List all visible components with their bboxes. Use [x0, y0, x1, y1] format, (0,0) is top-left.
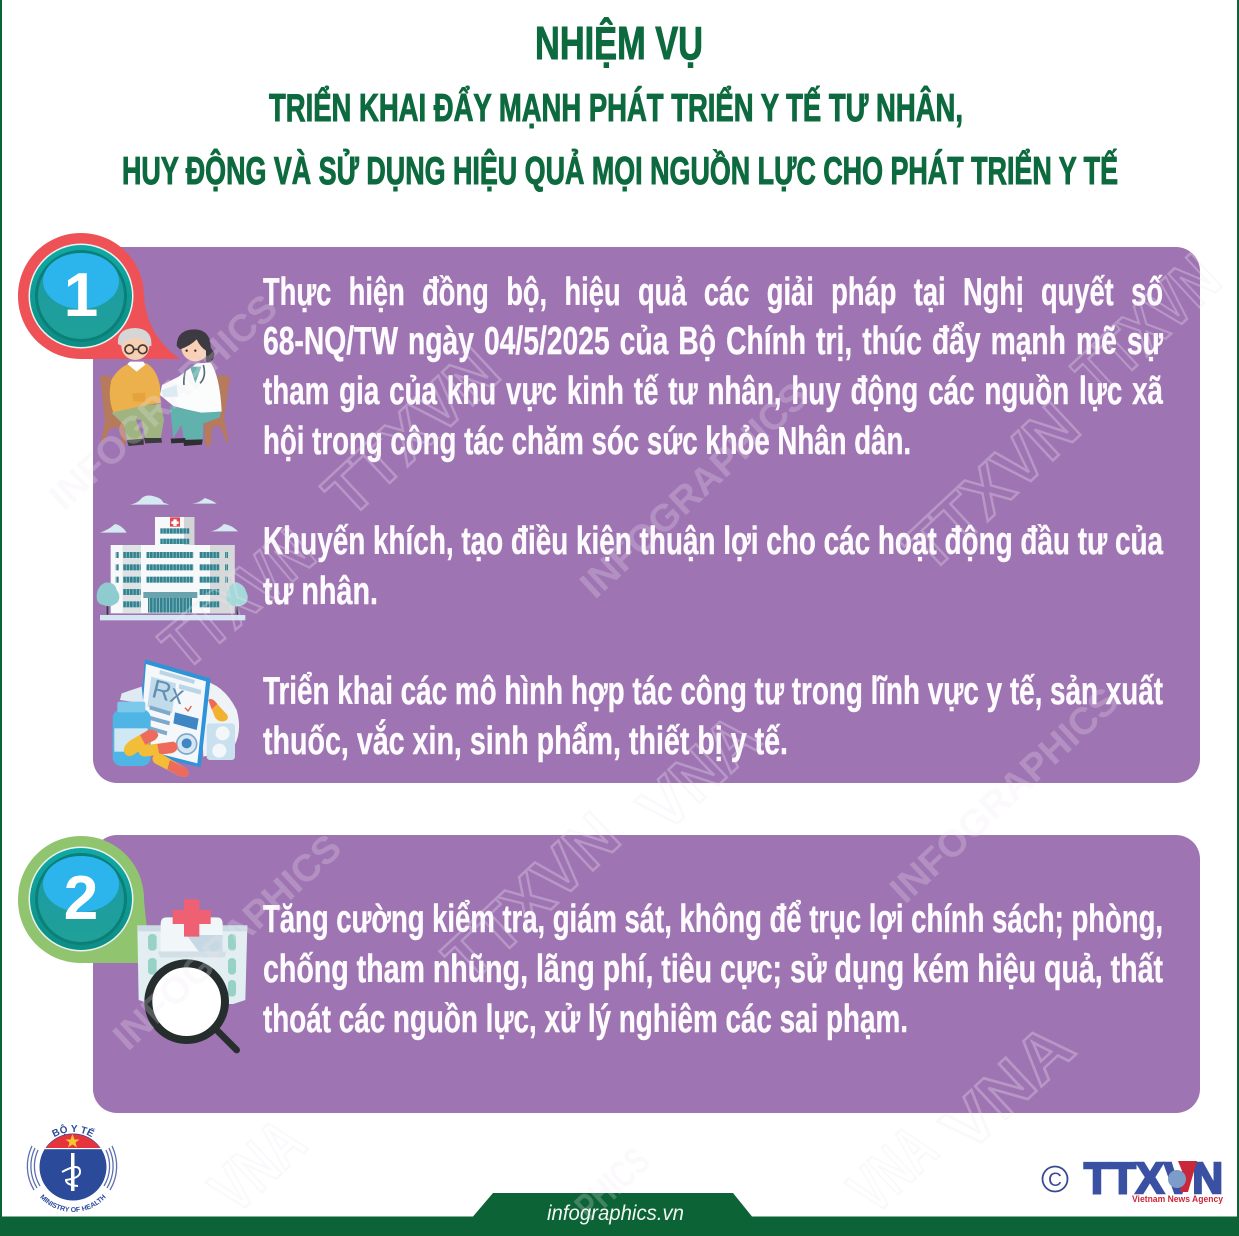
logo: ministry of health: MINISTRY OF HEALTH [40, 1194, 106, 1212]
paragraph 3 [263, 670, 1163, 763]
watermarks [41, 240, 1234, 1229]
title: TRIỂN KHAI ĐẨY MẠNH PHÁT TRIỂN Y TẾ TƯ NHÂN, [269, 85, 963, 130]
badge 2 [18, 836, 150, 963]
watermarks: INFOGRAPHICS [105, 827, 350, 1059]
watermarks: INFOGRAPHICS [572, 375, 817, 607]
badge 1: 1 [64, 261, 98, 330]
paragraph 2: tư nhân. [263, 570, 378, 613]
icon: hospital under magnifying glass [137, 899, 247, 1050]
icon: prescription and pills [113, 659, 239, 777]
watermarks: TTXVN [146, 514, 328, 683]
paragraph 2 [263, 520, 1163, 613]
watermarks: INFOGRAPHICS [41, 287, 286, 519]
badge 1 [18, 233, 180, 359]
logo: TTXVN: C [1048, 1170, 1062, 1191]
logo: TTXVN: Vietnam News Agency [1132, 1194, 1224, 1205]
watermarks: TTXVN [429, 798, 633, 995]
icon: prescription and pills: Rx [149, 673, 187, 710]
watermarks: INFOGRAPHICS [882, 680, 1127, 912]
footer bar [0, 1193, 1239, 1236]
logo: ministry of health: BỘ Y TẾ [52, 1124, 96, 1138]
badge 2: 2 [64, 864, 98, 933]
watermarks: TTXVN [889, 388, 1093, 585]
icon: elderly patient and doctor [100, 328, 230, 446]
panel 2 text: thoát các nguồn lực, xử lý nghiêm các sai phạm. [263, 998, 908, 1041]
panel 1 text [263, 271, 1164, 763]
icon: hospital building [97, 496, 248, 620]
logo: ministry of health [26, 1124, 118, 1212]
watermarks: VNA [834, 1111, 950, 1226]
title: NHIỆM VỤ [535, 17, 703, 69]
watermarks: TTXVN [309, 333, 513, 530]
watermarks: VNA [624, 699, 773, 845]
watermarks: VNA [195, 1104, 319, 1226]
paragraph 1: hội trong công tác chăm sóc sức khỏe Nhân dân. [263, 420, 911, 463]
paragraph 3: thuốc, vắc xin, sinh phẩm, thiết bị y tế. [263, 719, 788, 763]
watermarks: VNA [927, 1009, 1087, 1165]
paragraph 1 [263, 271, 1164, 463]
watermarks: PHICS [567, 1140, 658, 1229]
logo: TTXVN: TTXVN [1084, 1154, 1223, 1203]
panel 2 background [93, 835, 1200, 1113]
title [122, 17, 1118, 193]
panel 1 background [93, 247, 1200, 783]
footer bar: infographics.vn [547, 1202, 684, 1225]
panel 2 text [263, 898, 1163, 1041]
